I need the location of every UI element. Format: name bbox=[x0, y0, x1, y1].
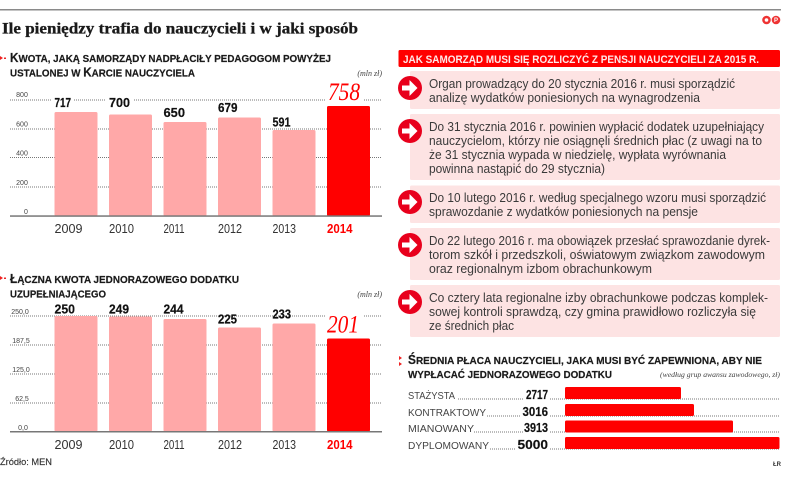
header bar: JAK SAMORZĄD MUSI SIĘ ROZLICZYĆ Z PENSJI NAUCZYCIELI ZA 2015 R. bbox=[403, 53, 759, 66]
heading: średnia płaca: ŚREDNIA PŁACA NAUCZYCIELI, JAKA MUSI BYĆ ZAPEWNIONA, ABY NIE bbox=[408, 352, 762, 367]
item 5: sowej kontroli sprawdzą, czy gmina prawidłowo rozliczyła się bbox=[429, 305, 756, 319]
bar chart: kwota: 679 bbox=[218, 100, 238, 115]
bar chart: dodatek: 250,0 bbox=[11, 309, 29, 316]
bar chart: kwota: 200 bbox=[16, 180, 28, 187]
bar chart: dodatek: 2011 bbox=[164, 438, 185, 452]
bar chart: kwota: 591 bbox=[272, 114, 290, 130]
panel: chart 2009-2014 overpayment bbox=[0, 51, 382, 236]
bar chart: kwota: 2009 bbox=[54, 222, 83, 236]
item 5 bbox=[398, 285, 780, 337]
title: Ile pieniędzy trafia do nauczycieli i w jaki sposób bbox=[2, 20, 358, 38]
bar chart: dodatek: 2010 bbox=[109, 438, 134, 452]
bar chart: dodatek: 0,0 bbox=[18, 425, 28, 432]
bar chart: kwota: 2010 bbox=[109, 222, 134, 236]
bar chart: dodatek: 244 bbox=[164, 302, 184, 316]
heading: średnia płaca bbox=[399, 352, 762, 381]
bar chart: kwota: 758 bbox=[328, 79, 360, 106]
unit label: (według grup awansu zawodowego, zł) bbox=[660, 370, 781, 379]
heading: chart 1: USTALONEJ W KARCIE NAUCZYCIELA bbox=[10, 66, 195, 80]
item 1: analizę wydatków poniesionych na wynagrodzenia bbox=[429, 91, 700, 105]
bar chart: dodatek: 187,5 bbox=[12, 338, 30, 345]
bar chart: płace: 5000 bbox=[518, 438, 548, 452]
item 2: powinna nastąpić do 29 stycznia) bbox=[429, 162, 605, 176]
item 1: Organ prowadzący do 20 stycznia 2016 r. musi sporządzić bbox=[429, 77, 735, 91]
bar chart: dodatek: 250 bbox=[54, 302, 75, 316]
bar chart: dodatek: 233 bbox=[272, 306, 291, 322]
bar chart: płace: STAŻYSTA bbox=[408, 389, 455, 402]
unit label: (mln zł) bbox=[357, 290, 382, 299]
bar chart: kwota: 600 bbox=[16, 122, 28, 128]
panel: chart jednorazowy dodatek bbox=[0, 272, 382, 452]
bar chart: płace: KONTRAKTOWY bbox=[408, 407, 486, 419]
bar chart: płace: 3016 bbox=[522, 405, 548, 419]
source: Źródło: MEN bbox=[0, 457, 52, 467]
item 4: oraz regionalnym izbom obrachunkowym bbox=[429, 262, 652, 276]
item 2: nauczycielom, którzy nie osiągnęli średnich płac (z uwagi na to bbox=[429, 134, 762, 148]
heading: chart 2: ŁĄCZNA KWOTA JEDNORAZOWEGO DODATKU bbox=[10, 272, 239, 286]
item 5: Co cztery lata regionalne izby obrachunkowe podczas komplek- bbox=[429, 291, 768, 305]
bar chart: płace: MIANOWANY bbox=[408, 423, 474, 435]
bar chart: dodatek: 201 bbox=[327, 312, 359, 338]
bar chart: kwota: 2011 bbox=[164, 222, 185, 236]
bar chart: dodatek: 125,0 bbox=[12, 367, 30, 374]
item 2: że 31 stycznia wypada w niedzielę, wypłata wyrównania bbox=[429, 148, 726, 162]
bar chart: płace bbox=[408, 387, 780, 452]
heading: chart 2 bbox=[0, 272, 239, 300]
bar chart: kwota: 400 bbox=[16, 150, 28, 158]
bar chart: kwota: 800 bbox=[16, 92, 28, 99]
item 4 bbox=[398, 228, 780, 280]
item 2 bbox=[398, 114, 780, 180]
heading: chart 1 bbox=[0, 51, 331, 80]
author initials: ŁR bbox=[773, 462, 782, 468]
item 3 bbox=[398, 186, 780, 223]
bar chart: płace: DYPLOMOWANY bbox=[408, 440, 489, 452]
bar chart: dodatek: 2009 bbox=[54, 438, 83, 452]
item 1 bbox=[398, 71, 780, 109]
unit label: (mln zł) bbox=[357, 69, 382, 78]
heading: chart 1: KWOTA, JAKĄ SAMORZĄDY NADPŁACIŁY PEDAGOGOM POWYŻEJ bbox=[10, 51, 331, 65]
item 3: sprawozdanie z wydatków poniesionych na pensje bbox=[429, 205, 698, 219]
panel: jak samorząd musi się rozliczyć bbox=[398, 50, 780, 337]
bar chart: dodatek: 225 bbox=[218, 312, 237, 326]
bar chart: kwota: 650 bbox=[164, 105, 185, 120]
bar chart: kwota: 0 bbox=[24, 209, 28, 216]
item 4: Do 22 lutego 2016 r. ma obowiązek przesłać sprawozdanie dyrek- bbox=[429, 234, 770, 248]
bar chart: kwota: 700 bbox=[109, 95, 130, 110]
logo: P bbox=[774, 18, 778, 24]
item 5: ze średnich płac bbox=[429, 319, 514, 333]
panel: średnia płaca nauczycieli bbox=[399, 352, 781, 452]
bar chart: dodatek bbox=[10, 302, 382, 452]
bar chart: dodatek: 2012 bbox=[218, 438, 242, 452]
bar chart: dodatek: 62,5 bbox=[15, 396, 29, 403]
bar chart: dodatek: 249 bbox=[109, 302, 129, 316]
bar chart: kwota: 2013 bbox=[272, 222, 296, 236]
bar chart: kwota: 2012 bbox=[218, 222, 242, 236]
bar chart: kwota: 717 bbox=[54, 95, 71, 110]
bar chart: kwota: 2014 bbox=[327, 222, 353, 236]
heading: chart 2: UZUPEŁNIAJĄCEGO bbox=[10, 288, 106, 300]
item 2: Do 31 stycznia 2016 r. powinien wypłacić dodatek uzupełniający bbox=[429, 120, 765, 134]
bar chart: kwota bbox=[10, 79, 382, 236]
bar chart: dodatek: 2013 bbox=[272, 438, 296, 452]
item 4: torom szkół i przedszkoli, oświatowym związkom zawodowym bbox=[429, 248, 765, 262]
heading: średnia płaca: WYPŁACAĆ JEDNORAZOWEGO DODATKU bbox=[408, 368, 612, 381]
bar chart: płace: 3913 bbox=[524, 421, 548, 435]
bar chart: płace: 2717 bbox=[526, 388, 548, 402]
logo bbox=[762, 16, 780, 24]
item 3: Do 10 lutego 2016 r. według specjalnego wzoru musi sporządzić bbox=[429, 191, 766, 205]
header bar bbox=[398, 50, 780, 67]
bar chart: dodatek: 2014 bbox=[327, 438, 353, 452]
